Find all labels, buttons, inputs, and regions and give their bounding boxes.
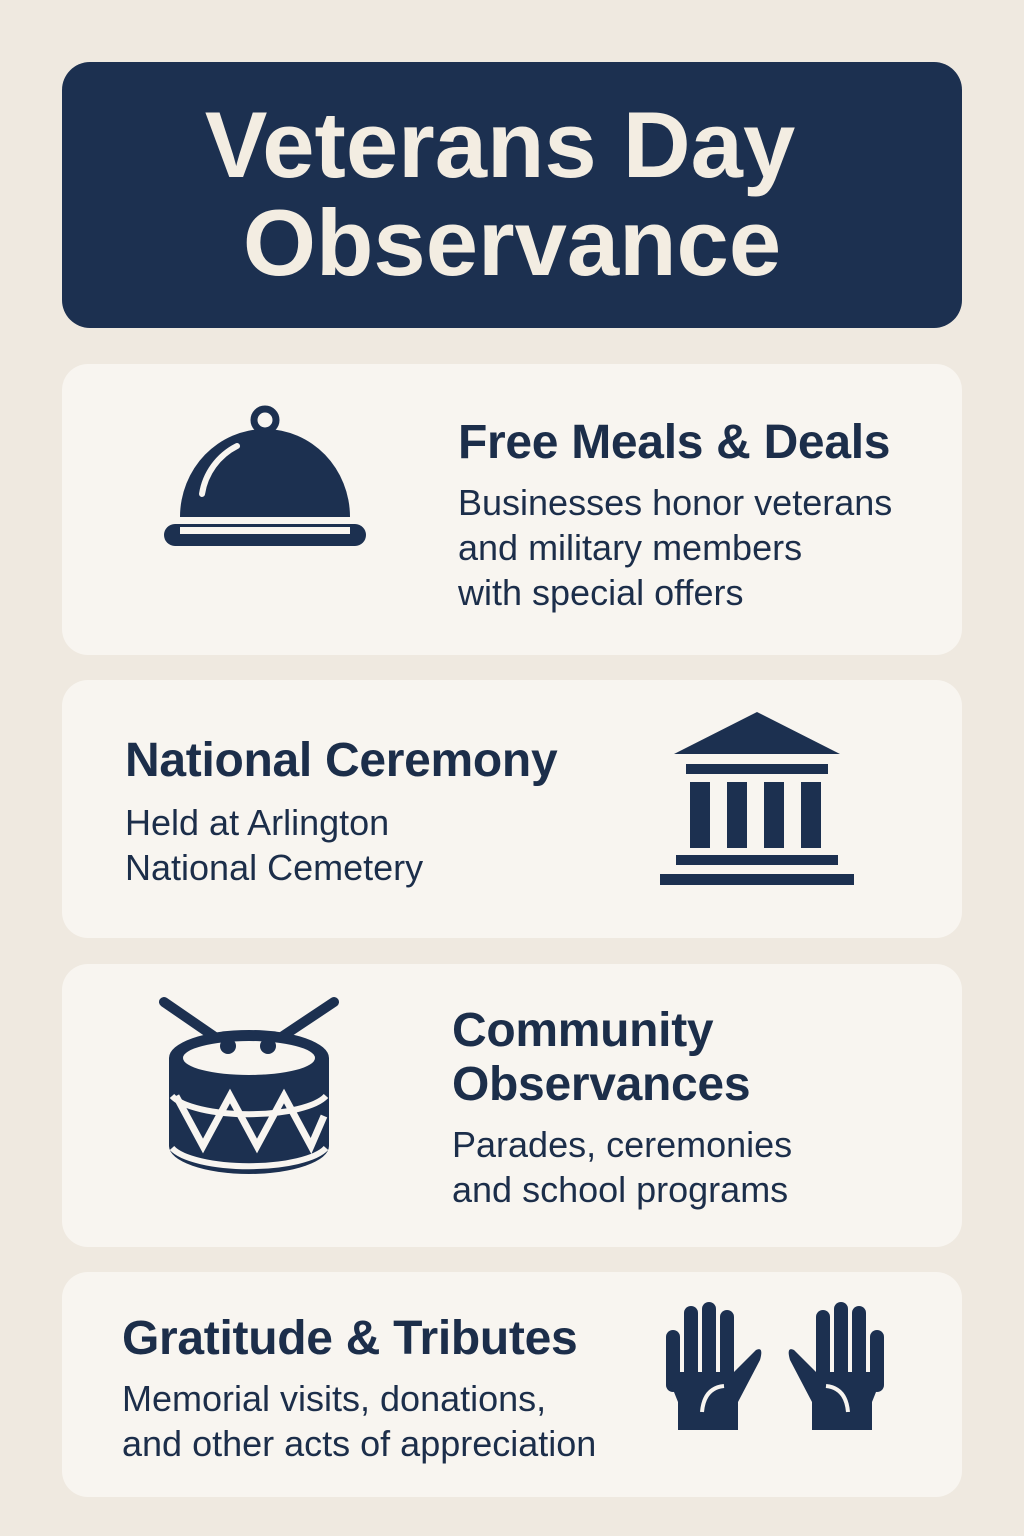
title banner xyxy=(62,62,962,328)
panel: free meals xyxy=(62,364,962,655)
text: free meals: Businesses honor veterans xyxy=(458,482,892,523)
text: free meals: Free Meals & Deals xyxy=(458,416,890,469)
text: national ceremony xyxy=(125,734,558,888)
text: community: Community xyxy=(452,1004,713,1057)
panel: community xyxy=(62,964,962,1247)
title banner: Veterans Day xyxy=(205,92,795,197)
icon: cloche xyxy=(164,406,366,546)
text: community xyxy=(452,1004,792,1210)
icon: building xyxy=(660,712,854,885)
text: gratitude xyxy=(122,1312,596,1464)
panel: national ceremony xyxy=(62,680,962,938)
text: gratitude: Memorial visits, donations, xyxy=(122,1378,546,1419)
icon: hands xyxy=(666,1302,884,1430)
text: community: Observances xyxy=(452,1058,750,1111)
icon: drum xyxy=(159,997,339,1174)
text: community: and school programs xyxy=(452,1169,788,1210)
title banner: Observance xyxy=(243,190,781,295)
panel: gratitude xyxy=(62,1272,962,1497)
text: free meals xyxy=(458,416,892,613)
text: national ceremony: Held at Arlington xyxy=(125,802,389,843)
text: gratitude: Gratitude & Tributes xyxy=(122,1312,577,1365)
text: free meals: and military members xyxy=(458,527,802,568)
text: national ceremony: National Cemetery xyxy=(125,847,423,888)
text: national ceremony: National Ceremony xyxy=(125,734,557,787)
text: gratitude: and other acts of appreciation xyxy=(122,1423,596,1464)
text: free meals: with special offers xyxy=(458,572,743,613)
text: community: Parades, ceremonies xyxy=(452,1124,792,1165)
